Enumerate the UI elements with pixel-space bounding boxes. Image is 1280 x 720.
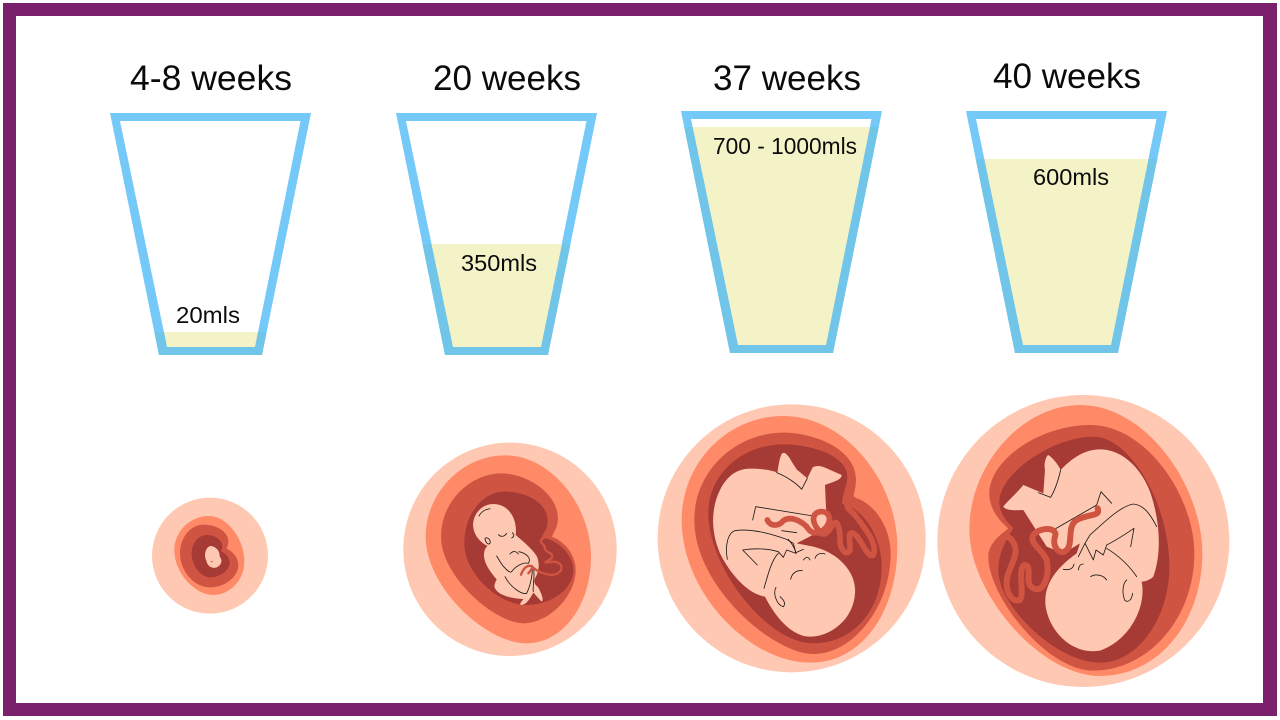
illustration: fetus at 20 weeks — [403, 443, 617, 656]
title: 20 weeks: 20 weeks — [433, 58, 581, 98]
illustration: embryo at 4-8 weeks — [152, 498, 268, 614]
cup: 4-8 weeks, 20mls — [110, 113, 311, 355]
cup: 20 weeks, 350mls — [396, 113, 597, 355]
label: 350mls: 350mls — [461, 250, 537, 276]
umbilical cord — [998, 508, 1098, 600]
illustration: fetus at 37 weeks — [658, 404, 926, 672]
fetus body — [473, 504, 543, 605]
cup: 40 weeks, 600mls — [966, 111, 1167, 353]
fetus body — [1003, 449, 1159, 651]
title: 4-8 weeks: 4-8 weeks — [130, 58, 292, 98]
title: 40 weeks: 40 weeks — [993, 56, 1141, 96]
label: 20mls: 20mls — [176, 302, 240, 328]
fetus body — [713, 453, 855, 637]
cup: 37 weeks, 700 - 1000mls — [681, 111, 882, 353]
umbilical cord — [767, 499, 874, 555]
title: 37 weeks: 37 weeks — [713, 58, 861, 98]
illustration: fetus at 40 weeks — [937, 395, 1229, 687]
label: 600mls: 600mls — [1033, 164, 1109, 190]
label: 700 - 1000mls: 700 - 1000mls — [713, 133, 857, 159]
umbilical cord — [521, 538, 562, 575]
